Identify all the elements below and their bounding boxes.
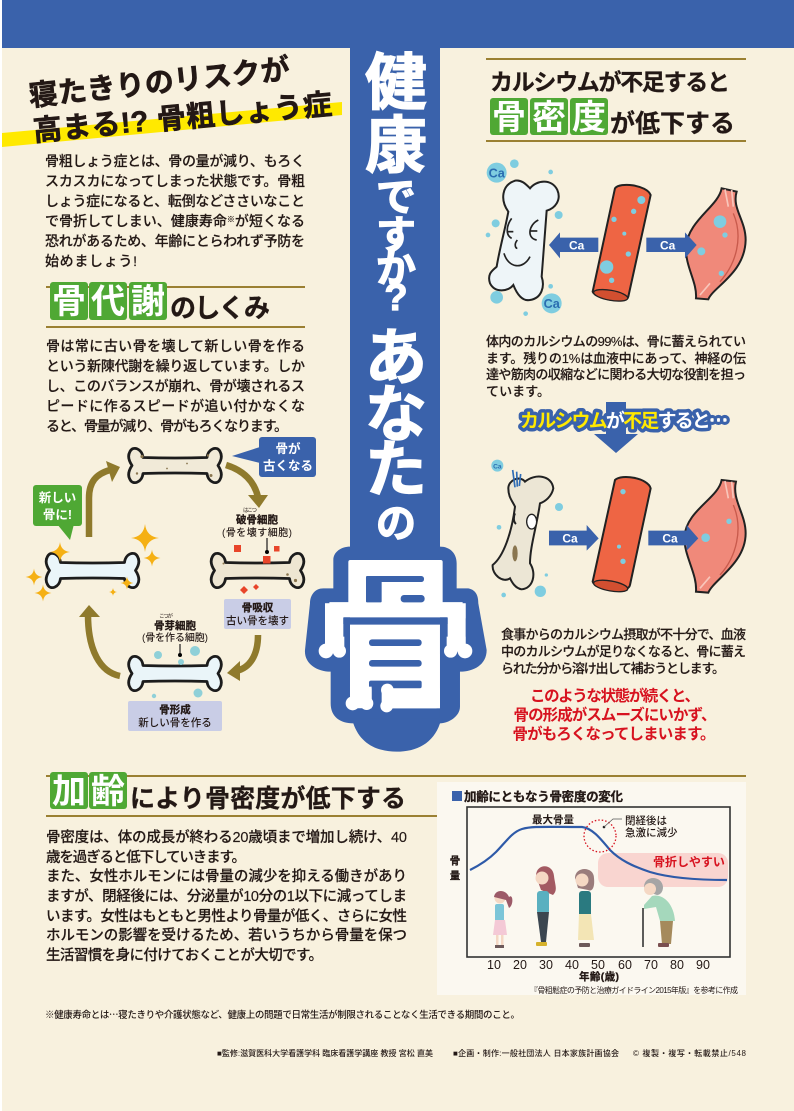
muscle <box>686 188 746 299</box>
title: 健康ですか?あなたの骨: 骨 <box>321 549 471 724</box>
label: osteoblast: こつが <box>159 612 173 620</box>
chart: bone density by age <box>437 782 746 995</box>
label: resorption: 古い骨を壊す <box>226 614 289 627</box>
person: middle-aged woman <box>575 869 594 947</box>
menopause marker: 急激に減少 <box>625 826 678 839</box>
label: osteoclast <box>222 507 292 554</box>
person: girl <box>493 891 512 948</box>
callout: bone gets old: 古くなる <box>263 458 313 473</box>
bone: new and shiny <box>46 553 139 588</box>
title: 健康ですか?あなたの骨: 康 <box>365 112 427 181</box>
heading: 骨代謝のしくみ: 骨 <box>52 283 86 321</box>
title: 健康ですか?あなたの骨: た <box>365 436 427 505</box>
axis label: bone mass <box>450 855 461 882</box>
callout: bone gets old <box>232 437 316 477</box>
bone: resorbing <box>211 553 304 588</box>
x axis labels: 60 <box>618 958 632 972</box>
text: 骨代謝 explanation <box>46 338 305 434</box>
banner: カルシウムが不足すると…: カルシウムが不足すると… <box>520 406 728 433</box>
menopause marker: 閉経後は <box>625 814 667 827</box>
callout: new bone: 新しい <box>39 490 76 505</box>
x axis labels: 20 <box>513 958 527 972</box>
section: 骨粗しょう症 heading <box>2 52 342 148</box>
arrow: calcium to blood <box>549 525 599 551</box>
arrow: calcium to bone <box>549 232 598 258</box>
text: red warning <box>512 686 716 743</box>
title: 健康ですか?あなたの骨: ? <box>384 277 408 319</box>
arrow: calcium to muscle <box>648 525 698 551</box>
bone character <box>486 159 563 316</box>
text: red warning: 骨の形成がスムーズにいかず、 <box>514 705 716 724</box>
arrow: calcium to blood: Ca <box>562 532 578 546</box>
plot frame <box>467 807 730 957</box>
weakened bone: Ca <box>493 463 502 470</box>
text: calcium in the body: 達や筋肉の収縮などに関わる大切な役割を担っ <box>486 367 746 382</box>
label: formation <box>128 701 222 731</box>
decorative counters and bone ends of the big character <box>319 576 472 718</box>
title: 健康ですか?あなたの骨: 健 <box>365 49 427 118</box>
x axis labels: 10 <box>487 958 501 972</box>
bone character: Ca <box>544 297 561 311</box>
text: aging and bone density: ホルモンの影響を受けるため、若いうちから骨量を保つ <box>46 926 407 944</box>
heading: カルシウムが不足すると骨密度が低下する <box>486 58 746 142</box>
illustration: healthy bone, blood vessel, muscle <box>486 159 746 316</box>
label: osteoblast <box>142 612 208 657</box>
title: 健康ですか?あなたの骨: か <box>376 247 416 291</box>
text: 骨粗しょう症 explanation: ※ <box>227 215 235 224</box>
text: 骨粗しょう症 explanation: 恐れがあるため、年齢にとらわれず予防を <box>45 233 305 249</box>
muscle <box>684 480 746 593</box>
heading: カルシウムが不足すると骨密度が低下する: 骨 <box>492 99 526 137</box>
text: calcium in the body: 体内のカルシウムの99%は、骨に蓄えられてい <box>486 334 746 349</box>
bone: forming <box>129 656 221 691</box>
text: aging and bone density: います。女性はもともと男性より骨量が低く、さらに女性 <box>46 907 407 925</box>
text: 骨粗しょう症 explanation: しょう症になると、転倒などささいなこと <box>45 193 305 209</box>
heading: 加齢により骨密度が低下する <box>46 772 746 817</box>
section: 骨粗しょう症 heading: 寝たきりのリスクが <box>27 52 291 113</box>
text: 骨粗しょう症 explanation: スカスカになってしまった状態です。骨粗 <box>45 173 305 189</box>
axis label: bone mass: 骨 <box>450 855 460 867</box>
label: osteoclast: 破骨細胞 <box>236 513 278 526</box>
text: 骨代謝 explanation: という新陳代謝を繰り返しています。しか <box>46 358 305 374</box>
credits: © 複製・複写・転載禁止/548 <box>633 1048 747 1058</box>
text: calcium in the body: ています。 <box>486 384 550 399</box>
diagram: bone remodeling cycle <box>26 437 316 731</box>
label: osteoclast: (骨を壊す細胞) <box>222 526 292 539</box>
footnote: ※健康寿命とは…寝たきりや介護状態など、健康上の問題で日常生活が制限されることなく生活できる期間のこと。 <box>45 1007 520 1021</box>
text: 骨代謝 explanation: し、このバランスが崩れ、骨が壊されるス <box>46 378 305 394</box>
title: 健康ですか?あなたの骨: あ <box>365 324 427 393</box>
text: calcium deficiency: 中のカルシウムが足りなくなると、骨に蓄え <box>501 644 746 659</box>
x axis labels: 30 <box>539 958 553 972</box>
heading: 骨代謝のしくみ: 謝 <box>131 283 165 321</box>
text: calcium in the body: ます。残りの1%は血液中にあって、神経の伝 <box>486 351 746 366</box>
heading: 加齢により骨密度が低下する: により骨密度が低下する <box>130 784 406 813</box>
blob behind the big character <box>305 540 487 752</box>
decorative white backing of the big character <box>325 560 466 708</box>
person: young woman <box>536 866 556 946</box>
callout: new bone: 骨に! <box>43 508 72 522</box>
text: 骨代謝 explanation: 骨は常に古い骨を壊して新しい骨を作る <box>46 338 305 354</box>
arrow: down <box>594 402 638 453</box>
label: osteoblast: 骨芽細胞 <box>154 619 196 632</box>
blood vessel <box>593 477 651 594</box>
bone: old <box>129 448 221 483</box>
label: osteoblast: (骨を作る細胞) <box>142 631 208 644</box>
text: aging and bone density: 生活習慣を身に付けておくことが大切です。 <box>46 946 323 964</box>
yellow highlight band <box>2 102 342 147</box>
text: calcium in the body <box>486 334 746 399</box>
arrow: calcium to muscle <box>646 232 697 258</box>
credits <box>217 1048 747 1058</box>
title background band <box>350 40 440 550</box>
arrow: calcium to muscle: Ca <box>662 532 678 546</box>
source note: 『骨粗鬆症の予防と治療ガイドライン2015年版』を参考に作成 <box>530 985 738 995</box>
text: calcium deficiency: られた分から溶け出して補おうとします。 <box>501 661 725 676</box>
curve <box>470 827 727 880</box>
title: 健康ですか?あなたの骨: な <box>365 381 427 450</box>
text: 骨粗しょう症 explanation: で骨折してしまい、健康寿命 <box>45 213 227 229</box>
x axis labels: 80 <box>670 958 684 972</box>
x axis labels: 40 <box>565 958 579 972</box>
arrow: calcium to bone: Ca <box>569 238 585 252</box>
heading: カルシウムが不足すると骨密度が低下する: 密 <box>532 99 566 137</box>
text: 骨代謝 explanation: ると、骨量が減り、骨がもろくなります。 <box>46 418 288 434</box>
heading: 骨代謝のしくみ: のしくみ <box>170 293 270 323</box>
text: 骨粗しょう症 explanation <box>45 153 305 269</box>
text: red warning: このような状態が続くと、 <box>530 686 700 705</box>
bone character: Ca <box>489 166 506 180</box>
text: red warning: 骨がもろくなってしまいます。 <box>512 724 716 743</box>
fracture risk zone <box>598 853 728 887</box>
heading: 骨代謝のしくみ <box>46 282 305 328</box>
x axis labels: 90 <box>696 958 710 972</box>
arrows of the cycle <box>88 465 258 676</box>
text: 骨粗しょう症 explanation: 骨粗しょう症とは、骨の量が減り、もろく <box>45 153 305 169</box>
text: aging and bone density: ますが、閉経後には、分泌量が10分の1以下に減ってしま <box>46 887 407 905</box>
credits: ■企画・制作:一般社団法人 日本家族計画協会 <box>453 1048 619 1058</box>
sparkles <box>26 524 160 602</box>
chart title: 加齢にともなう骨密度の変化 <box>464 789 623 804</box>
label: resorption: 骨吸収 <box>242 602 274 614</box>
osteoblast dots <box>152 646 202 698</box>
callout: new bone <box>33 485 82 540</box>
text: calcium deficiency: 食事からのカルシウム摂取が不十分で、血液 <box>501 627 746 642</box>
text: 骨粗しょう症 explanation: が短くなる <box>235 213 305 229</box>
title: 健康ですか?あなたの骨: で <box>376 176 416 220</box>
label: peak bone mass: 最大骨量 <box>532 813 574 826</box>
text: calcium deficiency <box>501 627 746 676</box>
illustration: weakened bone, blood vessel, muscle <box>491 460 746 597</box>
title: 健康ですか?あなたの骨: の <box>376 502 416 546</box>
label: resorption <box>224 599 291 629</box>
person: elderly woman with cane <box>643 878 675 947</box>
axis label: bone mass: 量 <box>450 870 461 882</box>
credits: ■監修:滋賀医科大学看護学科 臨床看護学講座 教授 宮松 直美 <box>217 1048 433 1058</box>
x axis labels: 50 <box>591 958 605 972</box>
label: formation: 骨形成 <box>159 703 191 716</box>
header band <box>2 0 794 48</box>
arrow: calcium to muscle: Ca <box>660 238 676 252</box>
bone fragments <box>234 545 280 594</box>
x axis labels: 70 <box>644 958 658 972</box>
fracture risk zone: 骨折しやすい <box>653 854 725 869</box>
heading: 骨代謝のしくみ: 代 <box>91 283 125 321</box>
menopause marker <box>584 814 678 852</box>
heading: 加齢により骨密度が低下する: 加 <box>52 773 86 811</box>
text: 骨代謝 explanation: ピードに作るスピードが追い付かなくな <box>46 398 305 414</box>
blood vessel <box>593 185 651 303</box>
x axis labels <box>487 958 710 972</box>
text: aging and bone density: また、女性ホルモンには骨量の減少を抑える働きがあり <box>46 867 407 885</box>
text: 骨粗しょう症 explanation: 始めましょう! <box>45 253 137 269</box>
heading: 加齢により骨密度が低下する: 齢 <box>91 773 125 811</box>
title: 健康ですか?あなたの骨: す <box>376 214 416 258</box>
text: aging and bone density: 骨密度は、体の成長が終わる20歳頃まで増加し続け、40 <box>46 828 407 846</box>
section: 骨粗しょう症 heading: 高まる!? 骨粗しょう症 <box>32 88 333 148</box>
text: aging and bone density <box>46 828 407 964</box>
text: aging and bone density: 歳を過ぎると低下していきます。 <box>46 849 246 866</box>
heading: カルシウムが不足すると骨密度が低下する: 度 <box>572 99 606 137</box>
heading: カルシウムが不足すると骨密度が低下する: が低下する <box>610 109 735 138</box>
callout: bone gets old: 骨が <box>275 441 301 456</box>
title: 健康ですか?あなたの骨 <box>305 40 487 752</box>
heading: カルシウムが不足すると骨密度が低下する: カルシウムが不足すると <box>490 69 730 95</box>
axis title: 年齢(歳) <box>579 970 619 983</box>
label: osteoclast: はこつ <box>243 507 257 514</box>
banner: カルシウムが不足すると…: カルシウムが不足すると… <box>520 406 728 433</box>
weakened bone <box>491 460 563 597</box>
label: formation: 新しい骨を作る <box>138 716 212 729</box>
